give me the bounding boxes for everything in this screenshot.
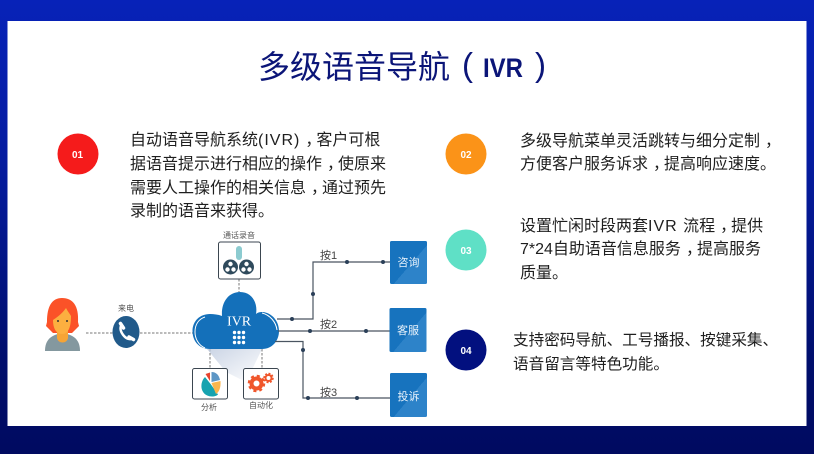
cloud shadow xyxy=(207,349,262,382)
icon: analysis pie: 分析 xyxy=(201,402,217,412)
title: ( xyxy=(462,46,473,83)
icon: call recording: 通话录音 xyxy=(223,230,255,240)
text 01: 需要人工操作的相关信息 ，通过预先 xyxy=(130,180,386,197)
icon: IVR cloud xyxy=(192,292,279,349)
text 01: 录制的语音来获得。 xyxy=(130,202,274,220)
text 02: 多级导航菜单灵活跳转与细分定制 ， xyxy=(520,133,781,150)
icon: person xyxy=(45,298,80,351)
item 01 xyxy=(58,131,386,220)
text 04: 支持密码导航、工号播报、按键采集、 xyxy=(513,331,778,349)
text 04: 语音留言等特色功能。 xyxy=(513,355,669,373)
box: customer service: 客服 xyxy=(397,323,419,337)
badge 04: 04 xyxy=(460,346,472,357)
title: IVR xyxy=(483,53,523,83)
icon: automation gears: 自动化 xyxy=(249,400,273,410)
badge 04 xyxy=(446,330,486,370)
icon: incoming call: 来电 xyxy=(118,303,134,313)
box: complaint: 投诉 xyxy=(398,389,420,403)
item 03 xyxy=(446,217,763,282)
text 01: 自动语音导航系统(IVR) ，客户可根 xyxy=(130,132,380,149)
route label 3: 按3 xyxy=(320,385,337,399)
IVR flow diagram xyxy=(45,230,427,417)
text 03: 7*24自助语音信息服务 ，提高服务 xyxy=(520,241,761,258)
box: consult: 咨询 xyxy=(398,255,420,269)
icon: IVR cloud: IVR xyxy=(227,314,252,330)
icon: automation gears xyxy=(244,368,278,410)
route lines xyxy=(275,262,390,398)
icon: call recording xyxy=(218,230,260,279)
item 02 xyxy=(446,132,781,174)
badge 02: 02 xyxy=(460,150,472,161)
box: customer service xyxy=(390,308,426,352)
icon: analysis pie xyxy=(192,368,228,412)
badge 01 xyxy=(58,134,98,174)
title: ) xyxy=(535,46,546,83)
box: consult xyxy=(390,241,427,284)
route label 2: 按2 xyxy=(320,317,337,331)
title xyxy=(258,46,546,85)
route label 1: 按1 xyxy=(320,248,337,262)
badge 01: 01 xyxy=(72,150,83,161)
text 02: 方便客户服务诉求 ，提高响应速度。 xyxy=(520,156,776,173)
item 04 xyxy=(446,330,778,373)
title: 多级语音导航 xyxy=(258,49,450,85)
icon: incoming call xyxy=(112,303,140,348)
badge 03 xyxy=(446,230,486,270)
badge 02 xyxy=(446,134,486,174)
route nodes xyxy=(290,260,385,400)
text 03: 质量。 xyxy=(520,264,568,282)
text 03: 设置忙闲时段两套IVR 流程 ，提供 xyxy=(520,218,763,235)
box: complaint xyxy=(390,373,427,417)
dashed connectors xyxy=(86,279,262,368)
text 01: 据语音提示进行相应的操作 ，使原来 xyxy=(130,156,386,173)
badge 03: 03 xyxy=(460,246,472,257)
